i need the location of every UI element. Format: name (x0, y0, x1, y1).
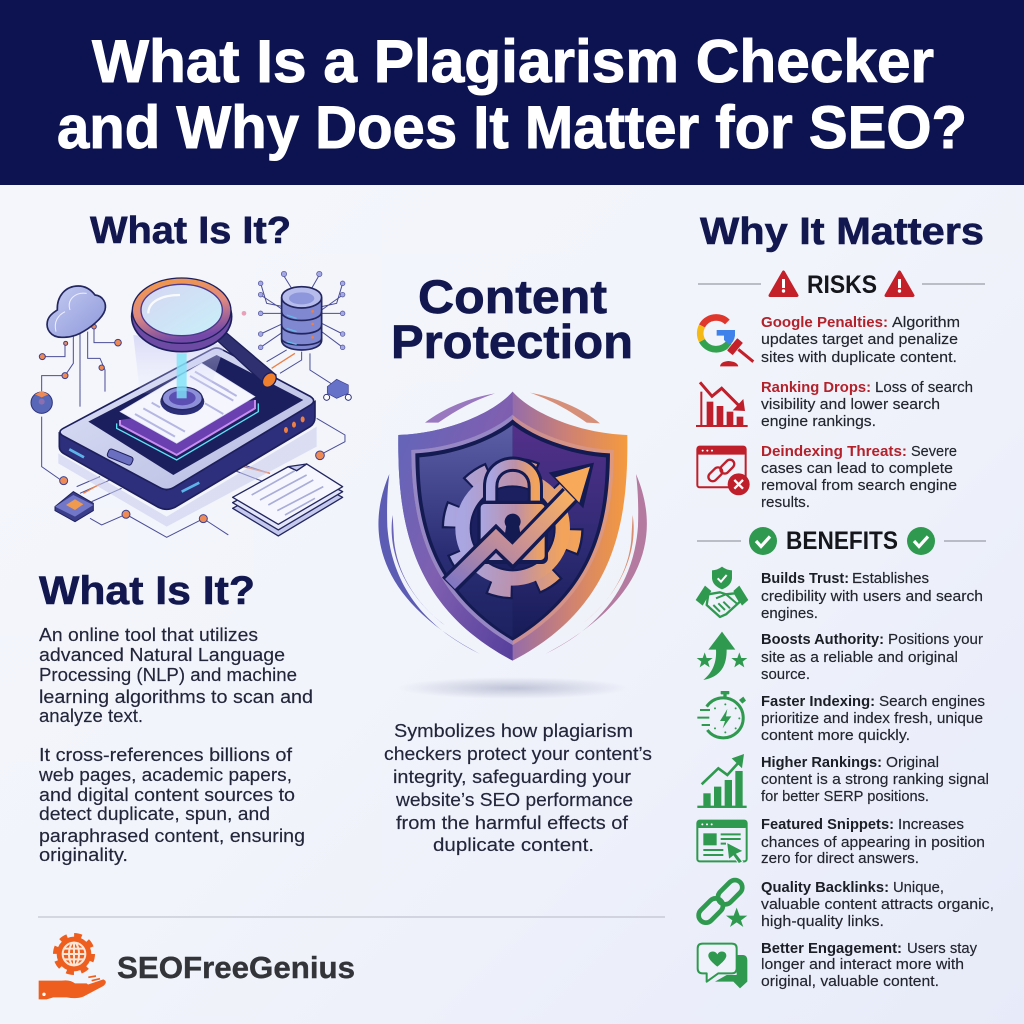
benefit: Better Engagement: Users stay (907, 941, 978, 957)
scan target (160, 388, 204, 415)
benefit: Faster Indexing: prioritize and index fresh, unique (761, 711, 983, 727)
benefit: Builds Trust (696, 567, 983, 622)
icon: chat bubbles with heart (698, 944, 747, 988)
benefit: Featured Snippets: zero for direct answers. (761, 851, 919, 867)
text block: symbolizes: website’s SEO performance (395, 790, 633, 810)
benefit: Quality Backlinks (696, 877, 994, 930)
nodes (39, 324, 324, 523)
header banner (0, 0, 1024, 185)
benefit: Quality Backlinks: valuable content attracts organic, (761, 897, 994, 913)
benefit: Boosts Authority: Positions your (888, 632, 983, 648)
swooshes (425, 393, 495, 423)
document stack (233, 464, 343, 536)
risk: Deindexing Threats: Deindexing Threats: (761, 444, 907, 460)
icon: chain link with star (696, 877, 747, 927)
icon: warning right (886, 272, 913, 296)
benefit: Boosts Authority: Boosts Authority: (761, 632, 884, 648)
benefit: Builds Trust: Builds Trust: (761, 571, 849, 587)
benefit: Boosts Authority: source. (761, 667, 810, 683)
risk: Deindexing Threats: removal from search engine (761, 478, 957, 494)
icon: stopwatch (697, 691, 746, 738)
illustration: plagiarism scanner tablet (31, 271, 351, 537)
benefit: Featured Snippets: chances of appearing in position (761, 835, 985, 851)
benefit: Builds Trust: Establishes (852, 571, 929, 587)
risks heading (698, 271, 985, 299)
icon: broken link window (697, 447, 750, 495)
risk: Deindexing Threats: Severe (911, 444, 957, 460)
text block: definition: learning algorithms to scan and (39, 687, 313, 707)
icon: check right (907, 527, 935, 555)
text block: definition: An online tool that utilizes (39, 625, 258, 645)
benefit: Better Engagement: original, valuable content. (761, 974, 939, 990)
text block: cross-references (38, 745, 305, 865)
text block: symbolizes: from the harmful effects of (396, 813, 629, 833)
globe node (31, 392, 52, 413)
text block: symbolizes: duplicate content. (433, 835, 594, 855)
icon: check left (749, 527, 777, 555)
heading: Content Protection (391, 270, 633, 368)
benefit: Faster Indexing: Faster Indexing: (761, 694, 875, 710)
magnifying glass (217, 332, 276, 386)
title: What Is a Plagiarism Checker (92, 28, 934, 95)
benefit: Higher Rankings: for better SERP positions. (761, 789, 929, 805)
risk: Google Penalties: Google Penalties: (761, 315, 888, 331)
benefit: Faster Indexing: content more quickly. (761, 728, 910, 744)
heading: Content Protection: Protection (391, 315, 633, 368)
risk: Ranking Drops: Ranking Drops: (761, 380, 871, 396)
benefit: Faster Indexing: Search engines (879, 694, 985, 710)
shield ground shadow (398, 677, 628, 699)
paper (120, 363, 255, 443)
device shadow (58, 427, 317, 527)
benefit: Featured Snippets (697, 817, 985, 867)
heading: What Is It? top: What Is It? (90, 210, 291, 252)
benefit: Higher Rankings: Higher Rankings: (761, 755, 882, 771)
text block: symbolizes (384, 721, 652, 855)
lock (491, 464, 535, 502)
benefit: Boosts Authority: site as a reliable and original (761, 650, 958, 666)
heading: What Is It? lower: What Is It? (39, 569, 255, 613)
chip (55, 492, 93, 522)
benefit: Higher Rankings: content is a strong ranking signal (761, 772, 989, 788)
risk: Ranking Drops: engine rankings. (761, 414, 876, 430)
icon: Google G with gavel (700, 317, 753, 366)
benefit: Featured Snippets: Increases (898, 817, 964, 833)
benefits heading (697, 527, 986, 555)
title (57, 28, 967, 161)
icon: browser window with cursor (697, 821, 747, 864)
risk: Ranking Drops: Loss of search (875, 380, 973, 396)
cloud (47, 286, 105, 337)
circuit lines (42, 275, 345, 537)
text block: definition (39, 625, 313, 726)
benefit: Builds Trust: credibility with users and search (761, 589, 983, 605)
database (282, 287, 322, 350)
risk: Ranking Drops: visibility and lower search (761, 397, 940, 413)
text block: definition: Processing (NLP) and machine (39, 665, 297, 685)
title: and Why Does It Matter for SEO? (57, 94, 967, 161)
benefit: Builds Trust: engines. (761, 606, 818, 622)
benefits heading: BENEFITS (786, 527, 898, 555)
risk: Ranking Drops (696, 380, 973, 430)
growth arrow (449, 495, 570, 585)
icon: warning left (770, 272, 797, 296)
benefit: Faster Indexing (697, 691, 985, 744)
benefit: Better Engagement: longer and interact more with (761, 957, 964, 973)
shield inner (415, 419, 610, 641)
logo: SEOFreeGenius: SEOFreeGenius (117, 950, 355, 985)
icon: gear globe in hand (39, 936, 106, 999)
risk: Deindexing Threats (697, 444, 957, 511)
text block: cross-references: It cross-references billions of (39, 745, 293, 765)
scan beam (133, 335, 225, 393)
screen (88, 355, 303, 475)
benefit: Quality Backlinks: high-quality links. (761, 914, 884, 930)
benefit: Higher Rankings: Original (886, 755, 939, 771)
logo: SEOFreeGenius (39, 936, 355, 999)
device body (59, 402, 315, 509)
benefit: Quality Backlinks: Unique, (893, 880, 944, 896)
benefit: Better Engagement: Better Engagement: (761, 941, 902, 957)
risk: Google Penalties: Algorithm (892, 315, 960, 331)
risk: Deindexing Threats: cases can lead to complete (761, 461, 953, 477)
risk: Deindexing Threats: results. (761, 495, 810, 511)
gear (451, 466, 575, 590)
text block: symbolizes: Symbolizes how plagiarism (394, 721, 633, 741)
risk: Google Penalties (700, 315, 960, 366)
text block: cross-references: detect duplicate, spun, and (39, 804, 270, 824)
shield outer (398, 392, 627, 661)
text block: definition: analyze text. (39, 706, 143, 726)
device details (106, 448, 134, 466)
text block: cross-references: originality. (39, 845, 128, 865)
risk: Google Penalties: updates target and penalize (761, 332, 958, 348)
risk: Google Penalties: sites with duplicate content. (761, 350, 957, 366)
text block: cross-references: and digital content sources to (39, 785, 295, 805)
text block: definition: advanced Natural Language (39, 645, 285, 665)
footer divider (38, 916, 665, 918)
heading: Why It Matters: Why It Matters (700, 211, 984, 253)
icon: falling bars (696, 382, 748, 427)
icon: arrow with stars (697, 632, 747, 680)
text block: symbolizes: checkers protect your content’s (384, 744, 652, 764)
text block: cross-references: paraphrased content, ensuring (39, 826, 305, 846)
text block: cross-references: web pages, academic papers, (38, 765, 292, 785)
benefit: Featured Snippets: Featured Snippets: (761, 817, 894, 833)
benefit: Better Engagement (698, 941, 978, 990)
icon: handshake with shield (696, 567, 748, 617)
benefit: Quality Backlinks: Quality Backlinks: (761, 880, 889, 896)
icon: shield with lock, gear and arrow (378, 392, 647, 661)
small chip right (327, 379, 348, 398)
text block: symbolizes: integrity, safeguarding your (393, 767, 631, 787)
benefit: Higher Rankings (697, 754, 989, 808)
benefit: Boosts Authority (697, 632, 983, 683)
heading: Content Protection: Content (418, 270, 607, 323)
icon: rising chart (697, 754, 747, 808)
risks heading: RISKS (807, 271, 877, 299)
